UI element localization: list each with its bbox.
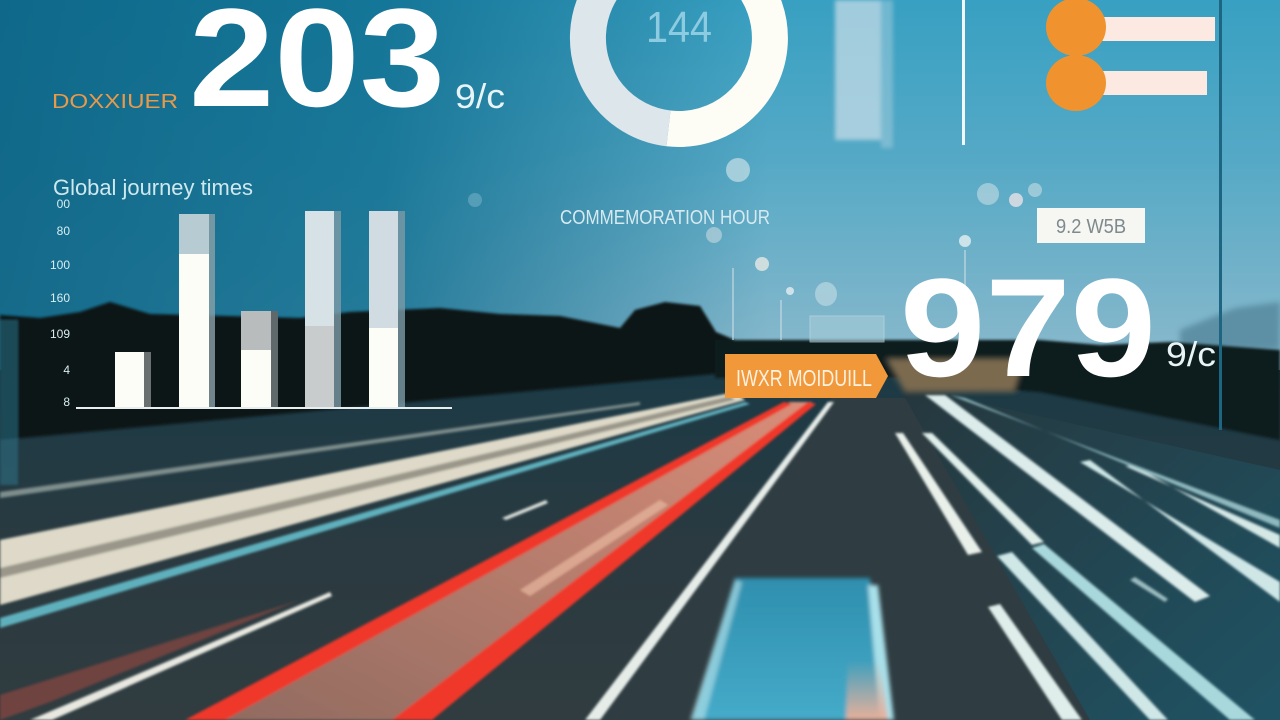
- background: highway: [0, 370, 1280, 720]
- orange marker 2: [1046, 55, 1106, 111]
- orange tag arrow: [725, 354, 888, 398]
- x axis: [76, 407, 452, 409]
- y axis labels: 80: [57, 224, 70, 238]
- y axis labels: [50, 197, 70, 409]
- orange label: DOXXIUER: [52, 91, 178, 113]
- bar 4: [305, 211, 341, 408]
- background: treeline: [0, 302, 1280, 485]
- orange tag arrow: IWXR MOIDUILL: [736, 365, 872, 391]
- stat unit: 9/c: [1166, 336, 1216, 374]
- right lane streaks: [895, 433, 982, 555]
- legend with orange markers: [1046, 0, 1215, 111]
- red light trails: [190, 402, 812, 720]
- y axis labels: 4: [63, 363, 70, 377]
- bar 2: [179, 214, 215, 408]
- y axis labels: 8: [63, 395, 70, 409]
- bar 5: [369, 211, 405, 408]
- y axis labels: 00: [57, 197, 70, 211]
- value box: 9.2 W5B: [1056, 216, 1126, 238]
- left white light trails: [0, 392, 745, 605]
- value box: [1037, 208, 1145, 243]
- bar 1: [115, 352, 151, 408]
- donut value: 144: [646, 3, 712, 52]
- background: sky: [0, 0, 1280, 400]
- stat unit: 9/c: [455, 78, 505, 116]
- orange marker 1: [1046, 0, 1106, 56]
- bar chart: [50, 197, 452, 409]
- blurred car: [690, 578, 894, 720]
- big stat: 979: 979: [900, 249, 1156, 406]
- donut chart: [588, 0, 770, 129]
- legend bar 2: [1098, 71, 1207, 95]
- y axis labels: 109: [50, 327, 70, 341]
- y axis labels: 160: [50, 291, 70, 305]
- white lane line: [585, 402, 834, 720]
- bar 3: [241, 311, 278, 408]
- chart title: Global journey times: [53, 175, 253, 200]
- center caption: COMMEMORATION HOUR: [560, 207, 770, 229]
- y axis labels: 100: [50, 258, 70, 272]
- pole: [1219, 0, 1222, 430]
- street lights and bokeh: [468, 158, 1042, 342]
- vertical divider: [962, 0, 965, 145]
- legend bar 1: [1098, 17, 1215, 41]
- translucent vertical bar: [835, 0, 893, 148]
